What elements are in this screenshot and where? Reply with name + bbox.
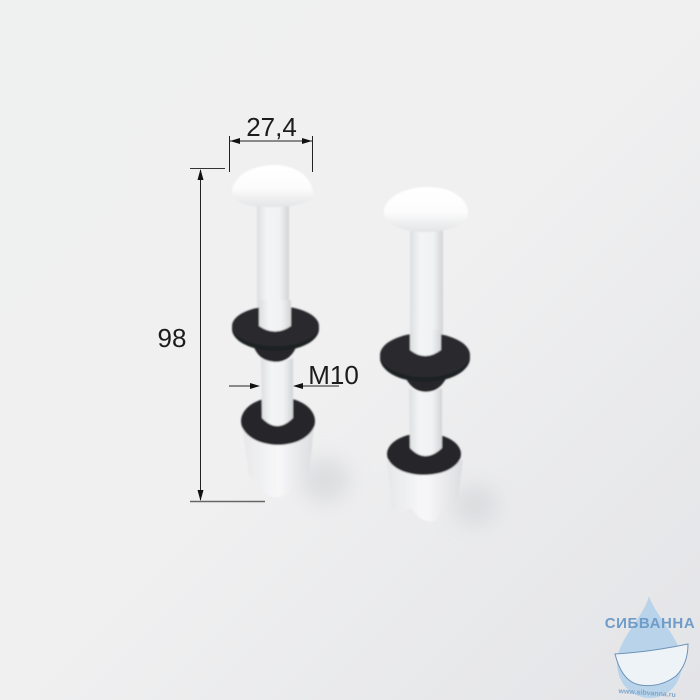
bolt shaft upper (410, 225, 443, 350)
shaft through washer (259, 300, 291, 332)
upper black washer (232, 306, 319, 362)
logo: Sibvanna (605, 596, 695, 699)
logo text: СИБВАННА (605, 615, 695, 632)
left bolt (232, 165, 319, 497)
right bolt (380, 187, 470, 522)
bolt cap (232, 165, 313, 207)
white nut (242, 426, 314, 497)
bolt shaft lower (261, 358, 293, 426)
lower black washer (241, 397, 315, 445)
logo drop (617, 596, 682, 698)
dimension: width 27,4 (229, 112, 313, 172)
shadows (301, 458, 497, 525)
bolt cap (384, 187, 468, 232)
dimension: thread M10 (229, 360, 359, 390)
bolt shaft upper (257, 200, 289, 330)
dimension: height 98 (158, 168, 265, 502)
logo url: www.sibvanna.ru (617, 688, 676, 699)
dimension: thread M10: M10 (308, 360, 359, 390)
white nut (387, 460, 463, 522)
shaft through washer (410, 330, 441, 356)
logo bathtub (615, 644, 688, 686)
lower black washer (387, 433, 461, 475)
dimension: height 98: 98 (158, 323, 186, 353)
dimension: width 27,4: 27,4 (246, 112, 297, 142)
upper black washer (380, 333, 470, 392)
bolt shaft lower (409, 388, 442, 456)
